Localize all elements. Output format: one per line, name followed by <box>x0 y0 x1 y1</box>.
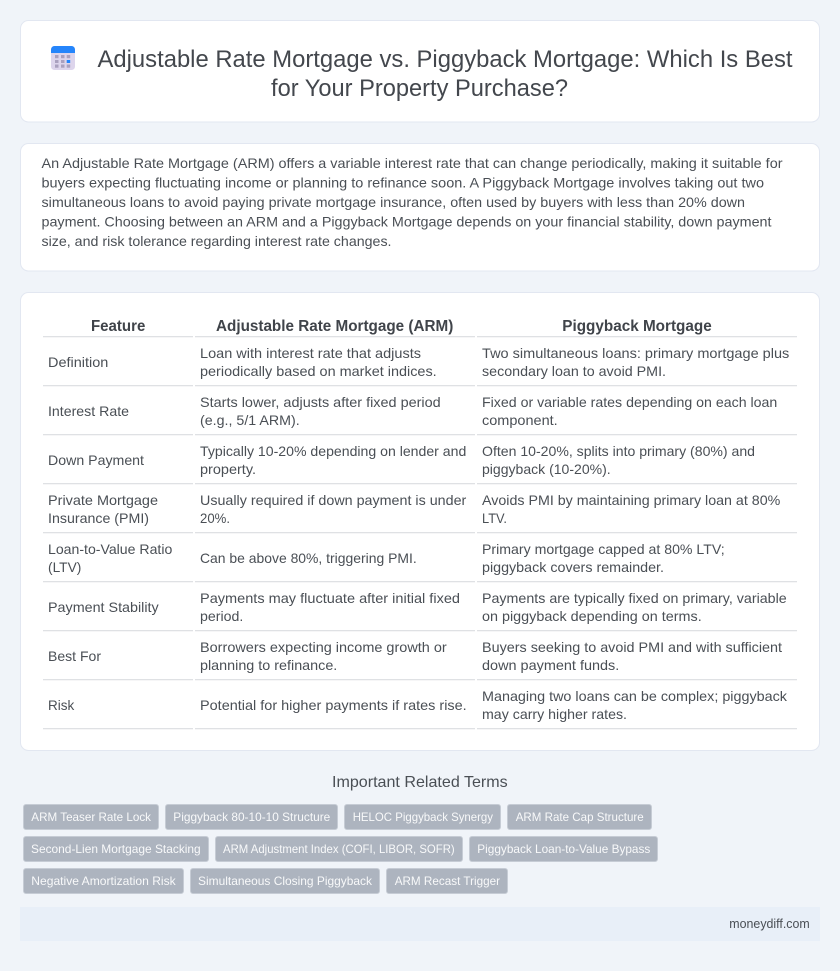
row: private mortgage insurance: Usually required if down payment is under <box>200 492 467 508</box>
panel: introduction text: payment. Choosing between an ARM and a Piggyback Mortgage depends on your financial stability, down payment <box>42 214 772 230</box>
footer bar <box>20 907 820 941</box>
row: loan-to-value ratio <box>43 541 797 582</box>
panel: introduction text: size, and risk tolerance regarding interest rate changes. <box>42 233 392 249</box>
table header row <box>43 318 797 337</box>
row: interest rate: Starts lower, adjusts after fixed period <box>200 394 441 410</box>
tag <box>344 804 500 830</box>
tag: Piggyback 80-10-10 Structure <box>173 810 331 824</box>
row: payment stability: period. <box>200 608 243 624</box>
row: down payment <box>43 443 797 484</box>
row: down payment: Typically 10-20% depending on lender and <box>200 443 466 459</box>
tag <box>166 804 338 830</box>
panel: header <box>20 20 820 122</box>
tag group: related terms <box>24 804 658 894</box>
row: best for: Borrowers expecting income growth or <box>200 639 447 655</box>
tag: Second-Lien Mortgage Stacking <box>31 842 201 856</box>
row: private mortgage insurance: Avoids PMI by maintaining primary loan at 80% <box>482 492 780 508</box>
row: definition: Definition <box>48 354 108 370</box>
row: best for: Best For <box>48 648 101 664</box>
row: payment stability: Payment Stability <box>48 599 159 615</box>
row: risk: Potential for higher payments if rates rise. <box>200 697 467 713</box>
row: private mortgage insurance: Private Mortgage <box>48 492 158 508</box>
row: definition: periodically based on market indices. <box>200 363 437 379</box>
panel: introduction text <box>20 144 820 271</box>
row: interest rate <box>43 394 797 435</box>
row: definition: Loan with interest rate that adjusts <box>200 345 421 361</box>
tag: Negative Amortization Risk <box>31 874 177 888</box>
row: loan-to-value ratio: Loan-to-Value Ratio <box>48 541 173 557</box>
tag: ARM Recast Trigger <box>395 874 500 888</box>
row: risk: Risk <box>48 697 75 713</box>
row: definition: secondary loan to avoid PMI. <box>482 363 666 379</box>
table header row: Feature <box>91 318 145 335</box>
tag <box>24 868 184 894</box>
row: payment stability <box>43 590 797 631</box>
table header row: Piggyback Mortgage <box>562 318 712 335</box>
row: loan-to-value ratio: Can be above 80%, triggering PMI. <box>200 550 417 566</box>
row: best for: planning to refinance. <box>200 657 337 673</box>
row: private mortgage insurance: 20%. <box>200 510 230 526</box>
row: risk: Managing two loans can be complex; piggyback <box>482 688 788 704</box>
tag: ARM Teaser Rate Lock <box>31 810 152 824</box>
row: risk <box>43 688 797 729</box>
row: risk: may carry higher rates. <box>482 706 627 722</box>
panel: introduction text: simultaneous loans to avoid paying private mortgage insurance, often used by buyers with less than 20% down <box>42 194 745 210</box>
row: definition: Two simultaneous loans: primary mortgage plus <box>482 345 789 361</box>
row: interest rate: Fixed or variable rates depending on each loan <box>482 394 777 410</box>
title: Adjustable Rate Mortgage vs. Piggyback Mortgage: Which Is Best <box>98 46 793 73</box>
panel: comparison table <box>20 292 820 750</box>
tag <box>24 836 208 862</box>
row: down payment: Often 10-20%, splits into primary (80%) and <box>482 443 755 459</box>
row: loan-to-value ratio: Primary mortgage capped at 80% LTV; <box>482 541 725 557</box>
row: private mortgage insurance <box>43 492 797 533</box>
tag <box>190 868 380 894</box>
tag <box>470 836 658 862</box>
row: definition <box>43 345 797 386</box>
title: for Your Property Purchase? <box>271 75 568 102</box>
row: payment stability: on piggyback depending on terms. <box>482 608 702 624</box>
row: loan-to-value ratio: (LTV) <box>48 559 81 575</box>
icon: calendar <box>51 46 75 70</box>
row: private mortgage insurance: LTV. <box>482 510 507 526</box>
footer bar: moneydiff.com <box>729 916 810 931</box>
tag <box>508 804 652 830</box>
tag: ARM Adjustment Index (COFI, LIBOR, SOFR) <box>223 842 455 856</box>
row: interest rate: (e.g., 5/1 ARM). <box>200 412 300 428</box>
tag <box>24 804 158 830</box>
row: interest rate: Interest Rate <box>48 403 129 419</box>
row: payment stability: Payments may fluctuate after initial fixed <box>200 590 460 606</box>
row: private mortgage insurance: Insurance (PMI) <box>48 510 149 526</box>
row: best for: Buyers seeking to avoid PMI and with sufficient <box>482 639 782 655</box>
row: best for <box>43 639 797 680</box>
title <box>98 46 793 102</box>
row: down payment: Down Payment <box>48 452 144 468</box>
heading: important related terms: Important Related Terms <box>332 774 508 791</box>
row: payment stability: Payments are typically fixed on primary, variable <box>482 590 787 606</box>
row: interest rate: component. <box>482 412 558 428</box>
row: loan-to-value ratio: piggyback covers remainder. <box>482 559 664 575</box>
panel: introduction text: buyers expecting fluctuating income or planning to refinance soon. A Piggyback Mortgage involves taking out two <box>42 174 764 190</box>
table header row: Adjustable Rate Mortgage (ARM) <box>216 318 453 335</box>
row: down payment: property. <box>200 461 256 477</box>
tag: Piggyback Loan-to-Value Bypass <box>477 842 650 856</box>
tag <box>216 836 462 862</box>
tag <box>386 868 508 894</box>
row: down payment: piggyback (10-20%). <box>482 461 611 477</box>
row: best for: down payment funds. <box>482 657 619 673</box>
tag: Simultaneous Closing Piggyback <box>198 874 373 888</box>
tag: ARM Rate Cap Structure <box>516 810 644 824</box>
tag: HELOC Piggyback Synergy <box>353 810 493 824</box>
panel: introduction text: An Adjustable Rate Mortgage (ARM) offers a variable interest rate that can change periodically, making it suitable for <box>42 155 783 171</box>
